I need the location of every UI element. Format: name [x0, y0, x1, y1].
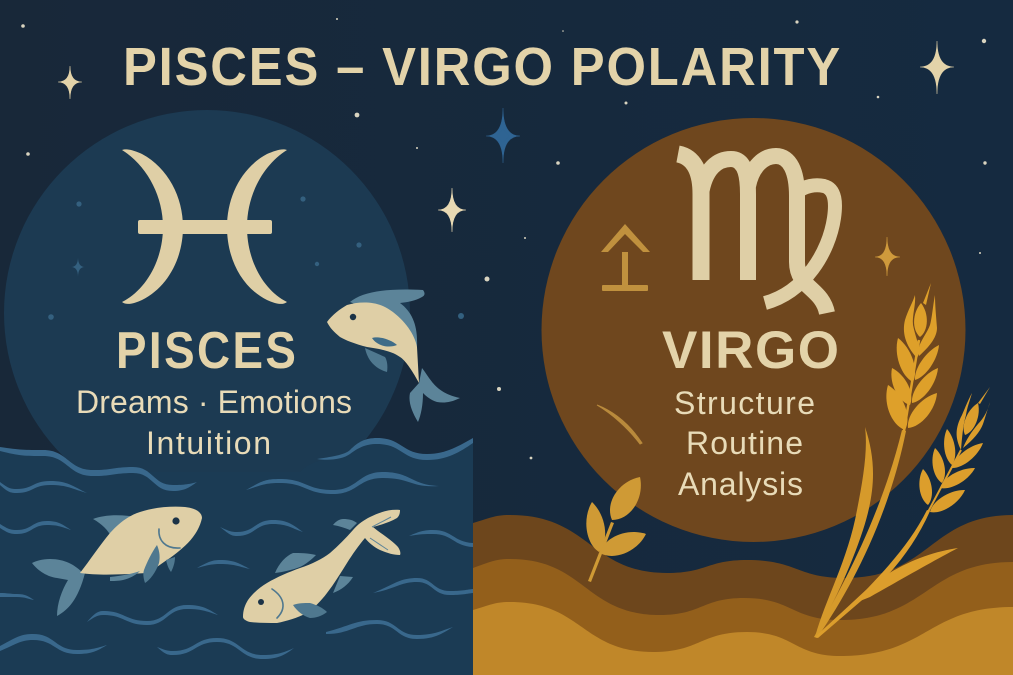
icon: fish swimming right — [32, 507, 202, 616]
star: blue centre sparkle — [486, 108, 520, 163]
icon: small sprig — [583, 471, 650, 582]
text: Virgo keywords: Structure — [674, 385, 815, 421]
star: upper left sparkle — [58, 66, 82, 99]
heading: VIRGO: VIRGO — [662, 321, 839, 380]
heading: PISCES: PISCES — [116, 322, 296, 380]
waves — [0, 438, 473, 659]
panel: Virgo circle — [542, 118, 966, 542]
text: Pisces keywords: Dreams · Emotions — [76, 384, 352, 420]
text: Virgo keywords: Analysis — [678, 466, 803, 502]
star: cream centre sparkle — [438, 188, 466, 232]
panel: earth layers — [473, 515, 1013, 675]
text: Virgo keywords — [674, 385, 815, 502]
icon: large wheat stalk — [814, 283, 944, 638]
icon: small wheat stalk — [815, 387, 990, 638]
star: gold sparkle — [875, 237, 900, 276]
panel: Pisces circle — [4, 110, 410, 516]
icon: ascending arrow emblem — [601, 224, 650, 291]
panel: sea — [0, 440, 473, 675]
icon: Pisces glyph — [122, 149, 287, 304]
text: Virgo keywords: Routine — [686, 425, 803, 461]
icon: Virgo glyph — [678, 154, 835, 313]
title: PISCES – VIRGO POLARITY — [123, 38, 840, 97]
decorative arc stroke — [597, 405, 642, 444]
icon: leaping fish — [327, 290, 460, 422]
text: Pisces keywords — [76, 384, 352, 461]
faint stars inside Pisces circle — [48, 196, 362, 320]
icon: fish swimming left — [243, 510, 400, 623]
star: upper right sparkle — [920, 41, 954, 94]
text: Pisces keywords: Intuition — [146, 425, 271, 461]
scattered stars — [21, 18, 987, 459]
